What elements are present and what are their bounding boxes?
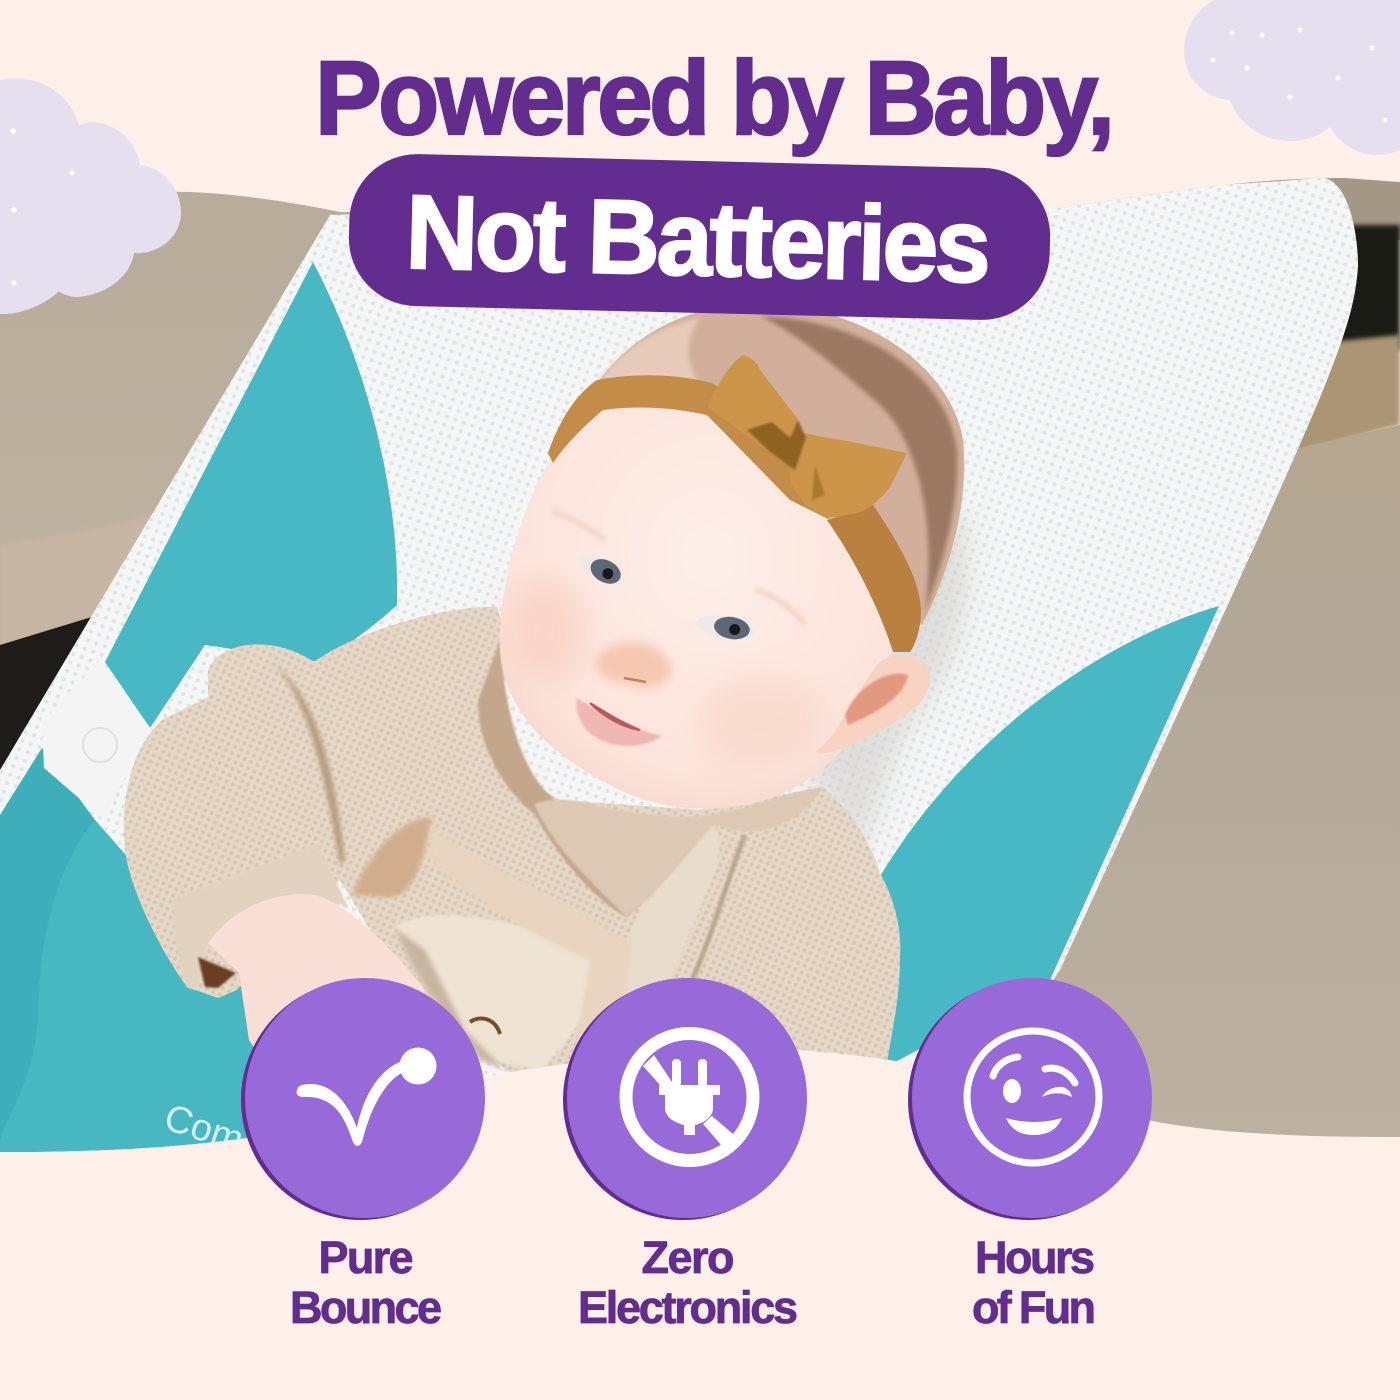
photo: baby in bouncer	[0, 178, 1400, 1152]
sweater front motif	[395, 915, 602, 1070]
nostril	[624, 678, 646, 682]
right wing	[790, 432, 907, 518]
cloud top right	[1184, 0, 1400, 155]
baby	[124, 305, 964, 1090]
teal panel right	[878, 606, 1219, 1070]
hand	[208, 894, 425, 1047]
head shadow on seat	[800, 500, 968, 860]
bow	[707, 355, 907, 518]
icon: bouncing ball	[297, 1048, 436, 1146]
sleeve cuff	[172, 843, 348, 990]
ear	[815, 655, 931, 753]
badge circle	[908, 978, 1152, 1220]
label: pure bounce	[290, 1232, 442, 1333]
sweater neck ribbing	[478, 640, 640, 917]
hair	[598, 305, 964, 625]
nose	[595, 642, 672, 688]
seat pocket	[0, 820, 260, 1160]
badge: pure bounce	[241, 978, 485, 1333]
sweater placket shadow	[688, 835, 745, 990]
badge: hours of fun	[908, 978, 1152, 1333]
sofa and floor backdrop	[0, 178, 1400, 1137]
label: zero electronics: Zero	[642, 1232, 734, 1283]
left wing	[708, 355, 799, 448]
brows	[552, 512, 805, 625]
left eye	[578, 554, 624, 584]
mouth	[576, 698, 662, 746]
title line 1: Powered by Baby,	[315, 39, 1115, 157]
badge: zero electronics	[563, 978, 807, 1333]
pill shape	[347, 152, 1052, 322]
headband right	[827, 505, 921, 652]
title line 2: Not Batteries	[405, 173, 992, 305]
teal panel lower left	[0, 748, 248, 1152]
motif shadow	[395, 928, 505, 1070]
label: hours of fun	[972, 1232, 1096, 1333]
icon: crossed out plug	[626, 1034, 753, 1160]
knot and folds	[747, 420, 806, 470]
icon: winking face	[967, 1031, 1099, 1163]
title pill	[347, 152, 1052, 322]
teal panel left	[105, 262, 397, 728]
fringe large	[430, 825, 632, 1050]
sweater body	[124, 607, 900, 1090]
label: zero electronics	[578, 1232, 798, 1333]
cloud top left	[0, 78, 181, 314]
white mesh seat	[0, 178, 1358, 1160]
label: hours of fun: of Fun	[972, 1282, 1096, 1333]
light hair front	[598, 318, 700, 385]
label: pure bounce: Bounce	[290, 1282, 442, 1333]
sleeve fold shadow	[275, 665, 345, 865]
badge circle	[241, 978, 485, 1220]
sleeve opening	[198, 957, 236, 988]
badge circle	[563, 978, 807, 1220]
label: zero electronics: Electronics	[578, 1282, 798, 1333]
dark hair edge	[760, 316, 957, 612]
seat logo text: Com	[159, 1097, 249, 1161]
sweater placket	[625, 824, 720, 994]
label: hours of fun: Hours	[975, 1232, 1095, 1283]
sleeve thread	[470, 1018, 500, 1034]
right cheek blush	[700, 675, 820, 765]
fringe small	[352, 818, 432, 897]
sweater collar	[534, 787, 823, 917]
headband	[548, 375, 830, 520]
right eye	[696, 616, 756, 640]
label: pure bounce: Pure	[318, 1232, 414, 1283]
head	[500, 305, 964, 809]
cheek blush	[505, 580, 585, 680]
white buckle strap	[42, 660, 152, 818]
